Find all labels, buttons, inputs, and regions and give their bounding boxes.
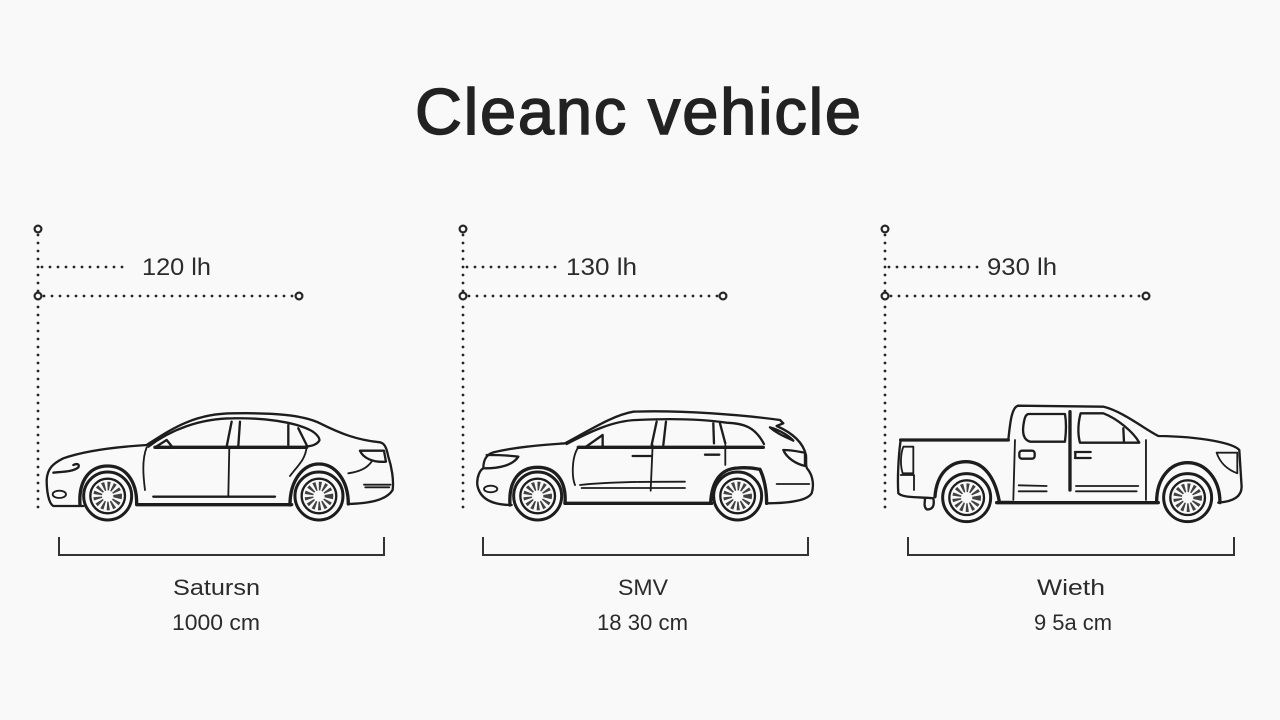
- wheel: [514, 472, 562, 520]
- length bracket: sedan: [59, 537, 384, 555]
- vehicle name: sedan: Satursn: [173, 575, 260, 600]
- height guide: sedan: [35, 226, 302, 508]
- height label: SUV: 130 lh: [566, 254, 637, 281]
- height guide: pickup: [882, 226, 1149, 508]
- title: Cleanc vehicle: [415, 75, 861, 148]
- length bracket: pickup: [908, 537, 1234, 555]
- vehicle name: SUV: SMV: [618, 575, 668, 600]
- wheel: [295, 472, 343, 520]
- height label: pickup: 930 lh: [987, 254, 1057, 281]
- length value: SUV: 18 30 cm: [597, 610, 688, 635]
- wheel: [943, 474, 991, 522]
- length bracket: SUV: [483, 537, 808, 555]
- height label: sedan: 120 lh: [142, 254, 211, 281]
- vehicle name: pickup: Wieth: [1037, 575, 1105, 600]
- truck illustration: pickup: [898, 406, 1242, 522]
- height guide: SUV: [460, 226, 726, 508]
- wheel: [714, 472, 762, 520]
- wheel: [84, 472, 132, 520]
- panel: SUV: [460, 226, 813, 635]
- wheel: [1164, 474, 1212, 522]
- car illustration: SUV: [477, 411, 813, 520]
- length value: pickup: 9 5a cm: [1034, 610, 1112, 635]
- length value: sedan: 1000 cm: [172, 610, 260, 635]
- panel: pickup: [882, 226, 1242, 635]
- panel: sedan: [35, 226, 393, 635]
- car illustration: sedan: [47, 413, 393, 520]
